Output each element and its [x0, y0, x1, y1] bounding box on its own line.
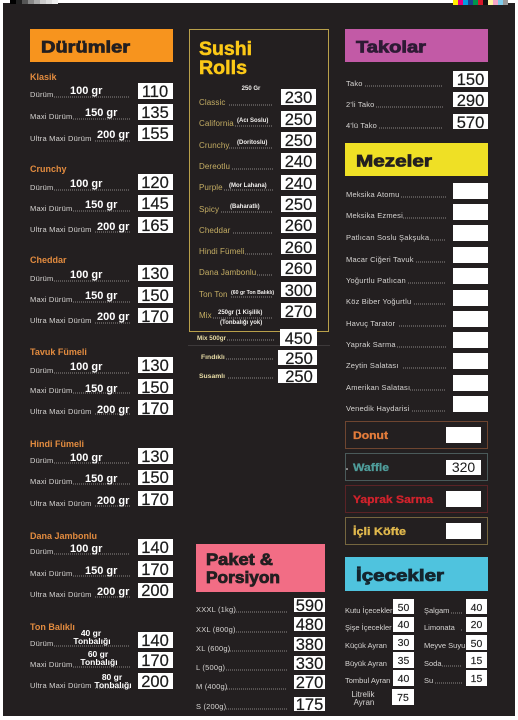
list: İçecekler left column: Küçük Ayran — [345, 641, 387, 650]
section: Crunchy: Dürüm — [30, 183, 54, 192]
roll: Hindi Fümeli: 260 — [285, 239, 312, 257]
section: Dana Jambonlu: 170 — [141, 561, 169, 579]
heading: Mezeler: Mezeler — [356, 152, 432, 170]
note: 250 Gr: 250 Gr — [242, 86, 261, 92]
list: İçecekler right column — [424, 599, 487, 686]
section: Crunchy: 100 gr — [70, 178, 103, 190]
section: Cheddar: 200 gr — [97, 311, 130, 323]
section: Ton Balıklı: Dürüm — [30, 639, 54, 648]
section: Tavuk Fümeli: 100 gr — [70, 361, 103, 373]
roll: Ton Ton — [199, 282, 316, 300]
list: İçecekler right column: Limonata — [424, 623, 456, 632]
roll: Hindi Fümeli: Hindi Fümeli — [199, 247, 245, 256]
heading: Sushi Rolls: Sushi — [199, 39, 252, 60]
section: Hindi Fümeli: 170 — [141, 491, 169, 509]
section: Dana Jambonlu: Ultra Maxi Dürüm — [30, 590, 92, 599]
list: Takolar prices — [346, 71, 488, 132]
heading: Sushi Rolls — [199, 39, 252, 79]
list: İçecekler right column: Şalgam — [424, 606, 449, 615]
section: Tavuk Fümeli: 130 — [141, 357, 169, 375]
roll: California: (Acı Soslu) — [237, 118, 268, 124]
roll: Hindi Fümeli — [199, 239, 316, 257]
heading: Takolar: Takolar — [356, 38, 426, 56]
section: Tavuk Fümeli: 150 — [141, 379, 169, 397]
section: Crunchy: 145 — [141, 195, 169, 213]
item box: Waffle: Waffle — [353, 462, 389, 474]
roll: Crunchy: Crunchy — [199, 141, 230, 150]
section: Ton Balıklı: Ultra Maxi Dürüm — [30, 681, 92, 690]
list: İçecekler right column: Meyve Suyu — [424, 641, 465, 650]
list: İçecekler left column: 35 — [398, 655, 409, 667]
section: Ton Balıklı: Maxi Dürüm — [30, 660, 72, 669]
section: Crunchy: 165 — [141, 217, 169, 235]
section: Dana Jambonlu: 200 gr — [97, 586, 130, 598]
section: Dana Jambonlu: Dürüm — [30, 547, 54, 556]
list: Mezeler: Venedik Haydarisi — [346, 404, 410, 413]
list: Mezeler: Yaprak Sarma — [346, 340, 396, 349]
section: Cheddar: Cheddar — [30, 255, 67, 265]
section: Hindi Fümeli: 150 — [141, 469, 169, 487]
section: Ton Balıklı: Tonbalığı — [73, 636, 111, 646]
list: Takolar prices: 2'li Tako — [346, 100, 375, 109]
roll: Dana Jambonlu: Dana Jambonlu — [199, 268, 256, 277]
roll: Dereotlu — [199, 153, 316, 171]
roll: Spicy: (Baharatlı) — [230, 204, 260, 210]
roll: Ton Ton: 300 — [285, 282, 312, 300]
section: Ton Balıklı: 170 — [141, 652, 169, 670]
list: Mezeler: Meksika Ezmesi — [346, 211, 403, 220]
list: İçecekler right column: 15 — [471, 673, 482, 685]
section: Ton Balıklı: 80 gr — [102, 672, 123, 682]
roll: California: 250 — [285, 111, 312, 129]
section: Hindi Fümeli: 200 gr — [97, 495, 130, 507]
row: Mix 500gr: Mix 500gr — [197, 335, 227, 342]
list: İçecekler left column: 40 — [398, 619, 409, 631]
roll: Mix — [199, 303, 316, 326]
section: Klasik: Maxi Dürüm — [30, 112, 72, 121]
roll: Purple: (Mor Lahana) — [229, 183, 267, 189]
section: Crunchy: 150 gr — [85, 199, 118, 211]
list: İçecekler right column: Soda — [424, 659, 442, 668]
section: Cheddar: 150 — [141, 287, 169, 305]
list: İçecekler left column: Kutu İçecekler — [345, 606, 393, 615]
section: Klasik: 150 gr — [85, 107, 118, 119]
section: Dana Jambonlu — [30, 531, 173, 600]
row: Susamlı: Susamlı — [199, 373, 225, 380]
list: İçecekler right column: 15 — [471, 655, 482, 667]
item box: Waffle — [346, 454, 488, 480]
section: Tavuk Fümeli: Tavuk Fümeli — [30, 347, 87, 357]
list: Mezeler — [346, 183, 488, 413]
section: Ton Balıklı: 200 — [141, 673, 169, 691]
row: Susamlı — [199, 368, 317, 386]
section: Crunchy: 120 — [141, 174, 169, 192]
section: Crunchy — [30, 164, 173, 235]
list: İçecekler left column: 75 — [397, 692, 409, 704]
section: Dana Jambonlu: Maxi Dürüm — [30, 569, 72, 578]
row: Susamlı: 250 — [285, 368, 313, 386]
section: Ton Balıklı: Ton Balıklı — [30, 622, 75, 632]
section: Klasik: Dürüm — [30, 90, 54, 99]
list: İçecekler left column: 50 — [398, 602, 409, 614]
list: İçecekler left column: Büyük Ayran — [345, 659, 387, 668]
roll: Spicy — [199, 196, 316, 214]
section: Dana Jambonlu: 100 gr — [70, 543, 103, 555]
list: İçecekler right column: Su — [424, 676, 433, 685]
roll: Dereotlu: Dereotlu — [199, 162, 230, 171]
list: İçecekler left column: Litrelik — [351, 690, 376, 699]
dot leaders — [213, 105, 273, 318]
section: Hindi Fümeli: Dürüm — [30, 456, 54, 465]
list: Paket & Porsiyon prices: XL (600g) — [196, 644, 231, 653]
item box: İçli Köfte: İçli Köfte — [353, 525, 406, 538]
list: Mezeler: Yoğurtlu Patlıcan — [346, 276, 406, 285]
roll: Crunchy — [199, 132, 316, 150]
section: Tavuk Fümeli: 150 gr — [85, 383, 118, 395]
roll: Dereotlu: 240 — [285, 153, 312, 171]
section: Cheddar: Maxi Dürüm — [30, 295, 72, 304]
section: Crunchy: Maxi Dürüm — [30, 204, 72, 213]
section: Klasik: 110 — [142, 83, 168, 101]
item box: İçli Köfte — [346, 518, 488, 544]
list: Takolar prices: 570 — [457, 114, 484, 132]
roll: Crunchy: 250 — [285, 132, 312, 150]
roll: Ton Ton: Ton Ton — [199, 290, 228, 299]
section: Hindi Fümeli: 100 gr — [70, 452, 103, 464]
list: Takolar prices: 4'lü Tako — [346, 121, 377, 130]
list: Paket & Porsiyon prices: 480 — [296, 616, 323, 634]
roll: Purple: 240 — [285, 175, 312, 193]
heading: Sushi Rolls: Rolls — [199, 58, 247, 79]
section: Crunchy: Ultra Maxi Dürüm — [30, 225, 92, 234]
heading: Paket & Porsiyon: Paket & — [206, 551, 273, 569]
section: Hindi Fümeli: Hindi Fümeli — [30, 439, 84, 449]
list: Paket & Porsiyon prices: S (200g) — [196, 702, 227, 711]
roll: Cheddar: Cheddar — [199, 226, 231, 235]
list: Mezeler: Patlıcan Soslu Şakşuka — [346, 233, 430, 242]
section: Dana Jambonlu: 200 — [141, 582, 169, 600]
list: İçecekler left column: 30 — [398, 637, 409, 649]
section: Cheddar: 170 — [141, 308, 169, 326]
item box: Donut — [346, 422, 488, 448]
list: Mezeler: Amerikan Salatası — [346, 383, 410, 392]
section: Cheddar — [30, 255, 173, 326]
heading: İçecekler — [345, 557, 488, 591]
list: Paket & Porsiyon prices — [196, 597, 325, 714]
heading: Dürümler: Dürümler — [41, 38, 130, 56]
section: Hindi Fümeli: 130 — [141, 448, 169, 466]
section: Tavuk Fümeli: 200 gr — [97, 404, 130, 416]
list: Mezeler: Havuç Tarator — [346, 319, 395, 328]
roll: Classic: Classic — [199, 98, 225, 107]
list: Takolar prices: 290 — [457, 92, 484, 110]
list: Paket & Porsiyon prices: 380 — [296, 636, 323, 654]
row: Mix 500gr: 450 — [285, 330, 312, 348]
list: İçecekler left column: Ayran — [354, 698, 374, 707]
print colour bar — [453, 0, 508, 5]
heading: Mezeler — [345, 143, 488, 176]
section: Tavuk Fümeli: Maxi Dürüm — [30, 386, 72, 395]
section: Klasik: 100 gr — [70, 85, 103, 97]
list: Mezeler: Zeytin Salatası — [346, 361, 399, 370]
list: Takolar prices: Tako — [346, 79, 363, 88]
section: Tavuk Fümeli: Ultra Maxi Dürüm — [30, 407, 92, 416]
section: Tavuk Fümeli: 170 — [141, 400, 169, 418]
roll: Purple: Purple — [199, 183, 223, 192]
list: Paket & Porsiyon prices: XXXL (1kg) — [196, 605, 236, 614]
item box: Yaprak Sarma: Yaprak Sarma — [353, 494, 434, 506]
heading: Paket & Porsiyon: Porsiyon — [206, 569, 280, 587]
section: Dana Jambonlu: 150 gr — [85, 565, 118, 577]
section: Ton Balıklı: 60 gr — [88, 649, 109, 659]
section: Klasik: 135 — [141, 104, 169, 122]
section: Klasik — [30, 72, 173, 143]
section: Crunchy: 200 gr — [97, 221, 130, 233]
list: Paket & Porsiyon prices: 330 — [296, 655, 323, 673]
roll: Classic — [199, 89, 316, 107]
roll: Dana Jambonlu — [199, 260, 316, 278]
print gray scale bar — [10, 0, 58, 4]
list: Paket & Porsiyon prices: XXL (800g) — [196, 625, 236, 634]
roll: Mix: 250gr (1 Kişilik) — [218, 310, 262, 316]
section: Dana Jambonlu: Dana Jambonlu — [30, 531, 97, 541]
section: Ton Balıklı: 40 gr — [81, 628, 102, 638]
section: Klasik: Ultra Maxi Dürüm — [30, 134, 92, 143]
list: İçecekler left column: 40 — [398, 673, 409, 685]
roll: Mix: Mix — [199, 311, 212, 320]
list: Mezeler: Köz Biber Yoğurtlu — [346, 297, 411, 306]
section: Cheddar: Ultra Maxi Dürüm — [30, 316, 92, 325]
section: Cheddar: 130 — [141, 265, 169, 283]
heading: İçecekler: İçecekler — [356, 566, 444, 585]
list: Takolar prices: 150 — [457, 71, 484, 89]
section: Hindi Fümeli: Ultra Maxi Dürüm — [30, 499, 92, 508]
list: Mezeler: Meksika Atomu — [346, 190, 399, 199]
section: Tavuk Fümeli: Dürüm — [30, 366, 54, 375]
section: Ton Balıklı: Tonbalığı — [80, 657, 118, 667]
list: İçecekler right column: 20 — [471, 619, 482, 631]
item box: Yaprak Sarma — [346, 486, 488, 512]
roll: Cheddar — [199, 217, 316, 235]
heading: Paket & Porsiyon — [196, 544, 325, 592]
roll: Spicy: Spicy — [199, 205, 219, 214]
section: Ton Balıklı — [30, 622, 173, 691]
roll: Purple — [199, 175, 316, 193]
row: Fındıklı: Fındıklı — [201, 354, 225, 361]
section: Ton Balıklı: Tonbalığı — [94, 680, 132, 690]
heading: Dürümler — [30, 29, 173, 62]
row: Fındıklı: 250 — [285, 350, 313, 368]
roll: Spicy: 250 — [285, 196, 312, 214]
row: Mix 500gr — [188, 329, 330, 348]
section: Klasik: 200 gr — [97, 129, 130, 141]
section: Ton Balıklı: 140 — [141, 632, 169, 650]
list: Paket & Porsiyon prices: 175 — [296, 696, 323, 714]
section: Cheddar: 100 gr — [70, 269, 103, 281]
roll: Classic: 230 — [285, 89, 312, 107]
item box: Donut: Donut — [353, 430, 388, 442]
section: Klasik: Klasik — [30, 72, 58, 82]
roll: Mix: (Tonbalığı yok) — [220, 320, 262, 326]
section: Hindi Fümeli: 150 gr — [85, 473, 118, 485]
roll: Dana Jambonlu: 260 — [285, 260, 312, 278]
panel: Sushi Rolls — [190, 30, 328, 332]
list: Mezeler: Macar Ciğeri Tavuk — [346, 255, 414, 264]
section: Klasik: 155 — [141, 125, 169, 143]
list: Paket & Porsiyon prices: L (500g) — [196, 663, 226, 672]
roll: Cheddar: 260 — [285, 217, 312, 235]
list: İçecekler right column: 40 — [471, 602, 482, 614]
roll: Crunchy: (Doritoslu) — [237, 140, 267, 146]
list: İçecekler left column: Şişe İçecekler — [345, 623, 392, 632]
list: İçecekler left column: Tombul Ayran — [345, 676, 390, 685]
roll: Mix: 270 — [285, 303, 312, 321]
item box: Waffle: 320 — [452, 459, 475, 475]
list: İçecekler left column — [345, 599, 414, 707]
list: İçecekler right column: 50 — [471, 638, 482, 650]
section: Tavuk Fümeli — [30, 347, 173, 418]
section: Hindi Fümeli: Maxi Dürüm — [30, 477, 72, 486]
section: Dana Jambonlu: 140 — [141, 539, 169, 557]
section: Crunchy: Crunchy — [30, 164, 67, 174]
roll: Ton Ton: (60 gr Ton Balıklı) — [231, 290, 274, 296]
roll: California — [199, 111, 316, 129]
list: Paket & Porsiyon prices: 590 — [296, 597, 323, 615]
section: Hindi Fümeli — [30, 439, 173, 509]
section: Cheddar: Dürüm — [30, 274, 54, 283]
list: Paket & Porsiyon prices: M (400g) — [196, 682, 228, 691]
roll: California: California — [199, 119, 234, 128]
heading: Takolar — [345, 29, 488, 62]
row: Fındıklı — [201, 350, 317, 368]
list: Paket & Porsiyon prices: 270 — [296, 674, 323, 692]
section: Cheddar: 150 gr — [85, 290, 118, 302]
